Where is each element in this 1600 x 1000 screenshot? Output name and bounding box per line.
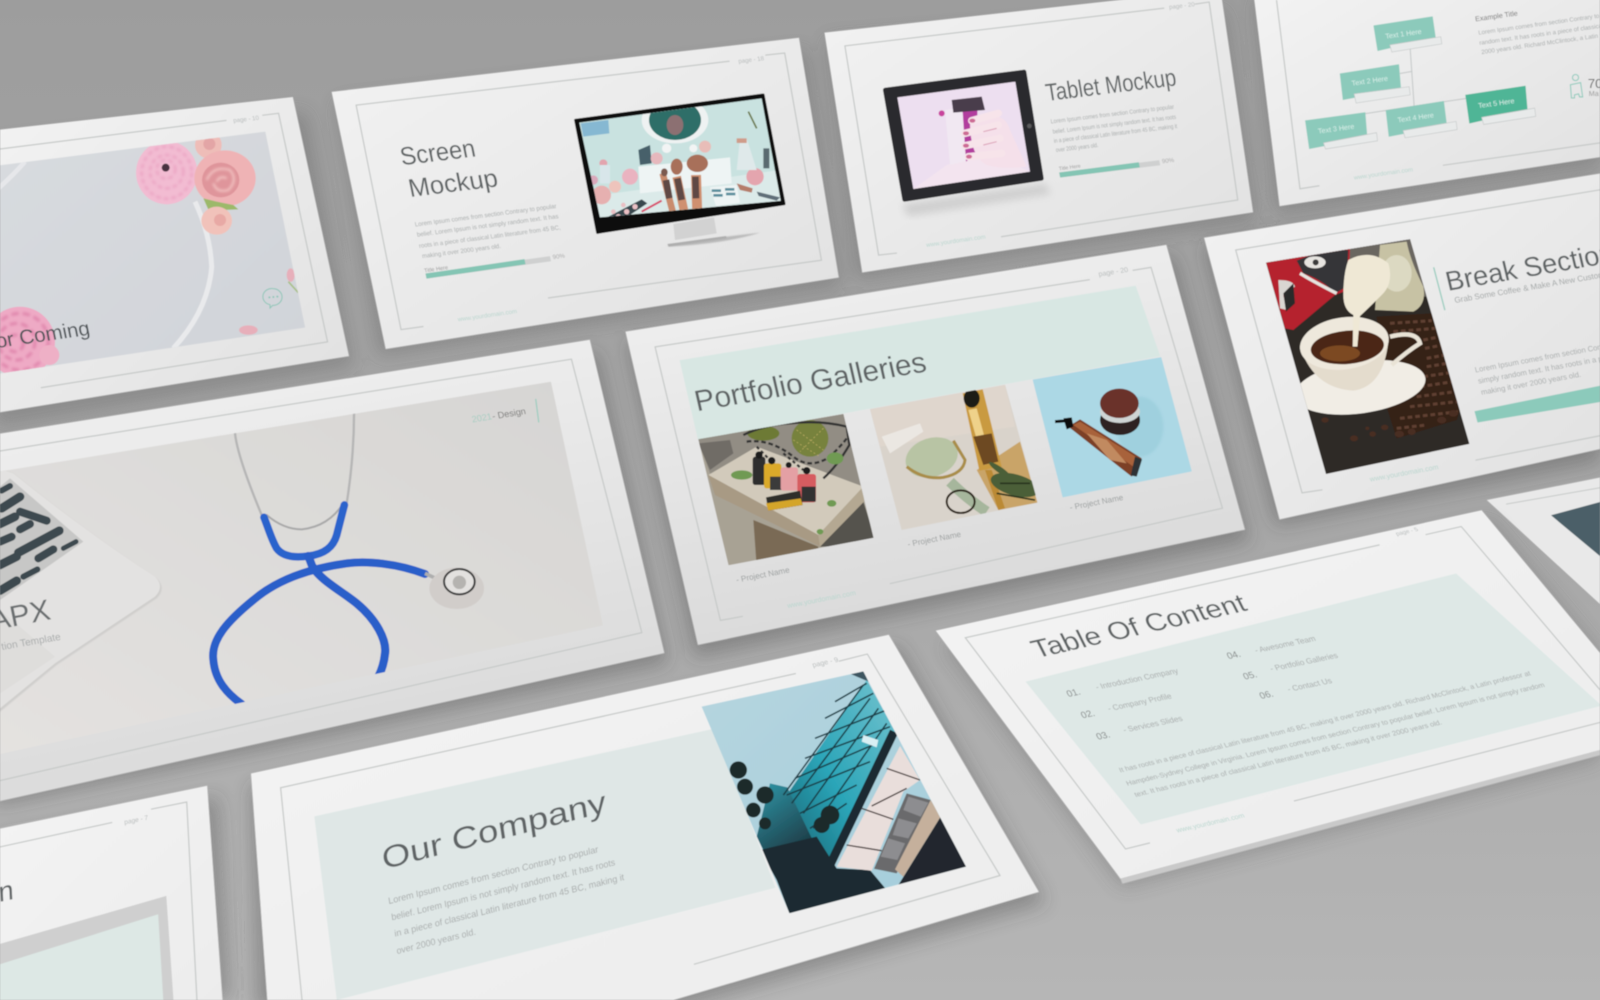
footer url: www.yourdomain.com — [1368, 463, 1439, 484]
body text: Lorem Ipsum comes from section Contrary to popular — [388, 844, 599, 906]
progress bar: Title Here — [1059, 163, 1081, 172]
contents list — [1065, 634, 1339, 743]
body text: making it over 2000 years old. — [1480, 370, 1582, 397]
body text: belief. Lorem Ipsum is not simply random text. It has roots — [391, 857, 616, 922]
progress bar: 90% — [552, 252, 566, 261]
heading: Portfolio Galleries — [691, 346, 929, 418]
panel: tablet mockup slide — [824, 0, 1257, 281]
photo: jade roller and gold bottle — [867, 380, 1043, 533]
body text — [1050, 104, 1178, 154]
example text: Example Title — [1475, 10, 1518, 23]
contents list: - Services Slides — [1121, 714, 1184, 734]
org node 4: Text 4 Here — [1397, 111, 1434, 124]
icon: chat bubble — [263, 289, 282, 308]
project captions: - Project Name — [1069, 493, 1125, 512]
footer url: www.yourdomain.com — [1174, 812, 1246, 835]
body text: over 2000 years old. — [396, 927, 476, 956]
accent rule — [536, 399, 539, 422]
contents list: 06. — [1258, 689, 1276, 702]
paragraph: Hampden-Sydney College in Virginia. Lorem Ipsum comes from section Contrary to popular belief. Lorem Ipsum is not simply random — [1125, 681, 1546, 788]
org node 5: Text 5 Here — [1478, 97, 1515, 110]
body text — [414, 203, 561, 260]
laptop — [0, 467, 162, 712]
chest piece — [425, 568, 484, 609]
progress bar: 90% — [1161, 157, 1175, 165]
panel: break section slide — [1204, 173, 1600, 526]
contents list: - Portfolio Galleries — [1268, 651, 1339, 673]
icon: person — [1570, 74, 1583, 98]
panel: flower slide — [0, 97, 355, 429]
footer url: www.yourdomain.com — [1352, 166, 1413, 182]
org node 3: Text 3 Here — [1317, 123, 1355, 136]
grey frame — [0, 896, 173, 1000]
photo: cosmetics on blue — [1030, 357, 1197, 503]
footer url: www.yourdomain.com — [925, 234, 986, 249]
org node 3 — [1305, 112, 1378, 149]
monitor mockup — [573, 93, 787, 247]
page label: page - 5 — [1394, 526, 1420, 537]
contents list: - Introduction Company — [1094, 666, 1181, 692]
body text: over 2000 years old. — [1055, 142, 1099, 154]
panel: medical cover slide — [0, 340, 668, 806]
teal bar — [1474, 386, 1600, 422]
org node 2: Text 2 Here — [1351, 75, 1389, 88]
body text: belief. Lorem Ipsum is not simply random text. It has roots — [1052, 114, 1177, 136]
contents list: - Company Profile — [1106, 692, 1174, 713]
page label: page - 20 — [1098, 266, 1129, 278]
body text: Lorem Ipsum comes from section Contrary to popular — [1050, 104, 1175, 125]
footer url: www.yourdomain.com — [785, 589, 857, 610]
project captions: - Project Name — [907, 530, 962, 549]
coffee photo — [1260, 233, 1477, 480]
paragraph: text. It has roots in a piece of classical Latin literature from 45 BC, making it over 2000 years old. — [1133, 719, 1443, 799]
paragraph: It has roots in a piece of classical Latin literature from 45 BC, making it over 2000 years old. Richard McClintock, a Latin professor at — [1118, 670, 1532, 774]
stethoscope photo — [0, 382, 596, 711]
teal block — [0, 914, 163, 1000]
body text: in a piece of classical Latin literature from 45 BC, making it — [1053, 123, 1178, 145]
org node 1: Text 1 Here — [1385, 28, 1422, 41]
panel: our company slide — [251, 635, 1046, 1000]
org node 2 — [1340, 64, 1410, 103]
teal band — [314, 729, 776, 1000]
footer url: www.yourdomain.com — [456, 308, 518, 324]
body text: belief. Lorem Ipsum is not simply random text. It has — [416, 213, 559, 239]
title band — [680, 286, 1160, 440]
org node 4 — [1386, 101, 1457, 138]
contents list: 02. — [1079, 708, 1097, 721]
contents list: - Contact Us — [1286, 676, 1334, 694]
connectors — [1335, 49, 1497, 122]
body text: in a piece of classical Latin literature from 45 BC, making it — [394, 872, 625, 939]
panel: partial bottom-left slide — [0, 786, 233, 1000]
body text: roots in a piece of classical Latin literature from 45 BC, — [418, 224, 561, 250]
heading: Table Of Content — [1026, 588, 1252, 664]
panel: table of content slide — [936, 510, 1600, 888]
heading: Our Company — [380, 785, 609, 876]
stethoscope — [213, 413, 425, 704]
page label: page - 10 — [233, 115, 260, 124]
heading — [398, 135, 500, 203]
photo corner — [1551, 502, 1600, 556]
panel: org chart slide — [1254, 0, 1600, 214]
project captions — [735, 493, 1125, 585]
example text — [1475, 10, 1600, 56]
accent rule — [1434, 267, 1445, 310]
cover subtitle: tion Template — [0, 632, 62, 653]
cover tag: 2021 — [471, 411, 493, 424]
contents list: 03. — [1094, 730, 1112, 743]
body text — [388, 844, 625, 956]
panel: far right slide — [1487, 478, 1600, 604]
org node 1 — [1373, 16, 1442, 52]
contents list: 01. — [1065, 687, 1083, 700]
org node 5 — [1465, 86, 1536, 124]
teal band — [1026, 573, 1600, 824]
body text — [1474, 338, 1600, 397]
progress bar — [424, 252, 566, 279]
photo: glass building — [697, 667, 973, 920]
body text: Lorem Ipsum comes from section Contrary to popular — [414, 203, 557, 228]
cover tag: - Design — [491, 406, 527, 421]
body text: making it over 2000 years old. — [421, 243, 502, 260]
progress bar — [1059, 157, 1175, 178]
contents list: - Awesome Team — [1253, 634, 1318, 655]
page label: page - 18 — [738, 55, 765, 65]
heading: Tablet Mockup — [1044, 65, 1178, 107]
page label: page - 9 — [811, 656, 840, 669]
stat: Ma — [1589, 90, 1599, 98]
tablet device — [885, 72, 1051, 216]
panel: screen mockup slide — [332, 38, 842, 357]
photo: wire basket on crate — [698, 414, 874, 566]
cover tag — [471, 406, 527, 424]
contents list: 04. — [1225, 649, 1243, 662]
panel: portfolio galleries slide — [626, 245, 1250, 658]
project captions: - Project Name — [735, 565, 791, 585]
heading: Mockup — [406, 165, 500, 203]
progress bar: Title Here — [424, 265, 449, 274]
flower photo — [0, 132, 305, 374]
page label: page - 7 — [124, 815, 149, 826]
stat — [1588, 76, 1600, 98]
heading: Screen — [398, 135, 478, 171]
contents list: 05. — [1241, 670, 1259, 682]
page label: page - 20 — [1169, 1, 1196, 11]
